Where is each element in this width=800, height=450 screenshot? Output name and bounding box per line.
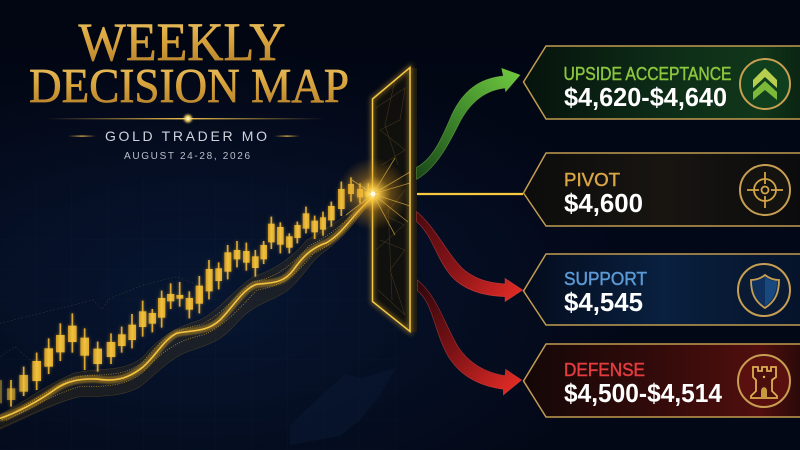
card: upside acceptance — [524, 46, 800, 119]
card: defense — [524, 344, 800, 417]
trend band — [0, 195, 373, 430]
mountain silhouette — [290, 368, 396, 445]
label: PIVOT — [564, 170, 620, 190]
candle bodies — [0, 184, 371, 403]
card: support — [524, 254, 800, 325]
candle wicks — [11, 177, 368, 407]
trend line — [0, 197, 373, 418]
gate frame — [372, 68, 410, 332]
title divider — [45, 115, 325, 123]
trend glow — [0, 197, 373, 418]
value: $4,500-$4,514 — [564, 380, 723, 408]
label: DEFENSE — [564, 360, 645, 380]
gold speckle — [0, 197, 373, 421]
icon: shield — [738, 264, 790, 316]
faint price line — [0, 277, 193, 360]
pivot path line — [417, 191, 523, 197]
author line: GOLD TRADER MO — [105, 128, 267, 144]
value: $4,545 — [564, 289, 643, 317]
icon: double chevron — [740, 59, 790, 109]
gate circuit lines — [376, 80, 405, 315]
gate frame glow — [372, 68, 410, 332]
title: WEEKLY — [78, 12, 286, 72]
title — [29, 12, 349, 113]
icon: target — [740, 165, 790, 215]
arrow: upside, green — [417, 68, 520, 179]
title: DECISION MAP — [29, 58, 349, 113]
label: SUPPORT — [564, 269, 647, 289]
value: $4,600 — [564, 190, 643, 218]
card shape — [524, 46, 800, 119]
card shape — [524, 254, 800, 325]
label: UPSIDE ACCEPTANCE — [564, 64, 732, 84]
value: $4,620-$4,640 — [564, 84, 727, 112]
card shape — [524, 153, 800, 226]
arrow: support, red — [417, 212, 523, 302]
candles — [0, 177, 371, 407]
icon: castle tower — [738, 355, 790, 407]
trend band edges — [0, 195, 373, 428]
card shape — [524, 344, 800, 417]
candlestick chart and trend wave — [0, 177, 373, 430]
date: AUGUST 24-28, 2026 — [124, 151, 250, 162]
card: pivot — [524, 153, 800, 226]
decision gate — [372, 68, 417, 332]
arrow: defense, red — [417, 280, 522, 395]
light burst — [337, 158, 410, 235]
